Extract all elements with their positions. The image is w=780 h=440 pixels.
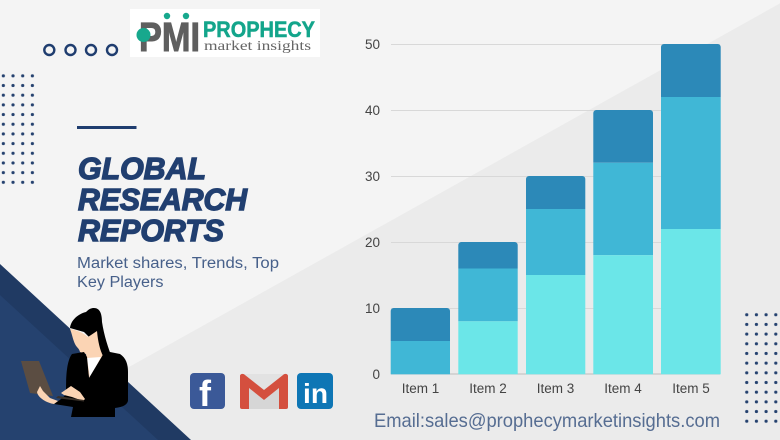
x axis labels: Item 1 (402, 381, 439, 396)
right dot grid (742, 310, 780, 426)
x axis labels: Item 4 (604, 381, 642, 396)
y axis labels: 50 (365, 37, 380, 52)
y axis labels: 20 (365, 235, 380, 250)
subtitle (77, 255, 279, 291)
icon: linkedin: in (303, 378, 328, 409)
item 1 bar (391, 308, 450, 374)
logo: Prophecy Market Insights (130, 9, 320, 60)
heading accent bar (77, 126, 136, 129)
item 5 bar (661, 44, 721, 374)
logo: Prophecy Market Insights: PROPHECY (203, 17, 315, 42)
item 2 bar (458, 242, 518, 374)
subtitle: Market shares, Trends, Top (77, 255, 279, 272)
email contact: Email:sales@prophecymarketinsights.com (374, 410, 720, 432)
x axis labels: Item 2 (469, 381, 507, 396)
x axis labels: Item 3 (537, 381, 574, 396)
x axis labels: Item 5 (672, 381, 710, 396)
y axis labels: 0 (372, 367, 380, 382)
y axis labels (365, 37, 380, 382)
logo: Prophecy Market Insights: market insights (204, 39, 311, 54)
y axis labels: 30 (365, 169, 380, 184)
icon: gmail (240, 374, 288, 409)
y axis labels: 10 (365, 301, 380, 316)
y axis labels: 40 (365, 103, 380, 118)
icon: linkedin (297, 373, 333, 409)
icon: woman with laptop (21, 308, 128, 417)
title (78, 151, 248, 248)
icon: facebook: f (199, 373, 212, 414)
subtitle: Key Players (77, 274, 164, 291)
title: REPORTS (78, 213, 224, 248)
title: RESEARCH (78, 182, 248, 217)
four ring decoration (44, 45, 117, 55)
icon: facebook (190, 373, 225, 414)
title: GLOBAL (78, 151, 206, 186)
item 4 bar (593, 110, 653, 374)
logo: Prophecy Market Insights: PMI (139, 14, 200, 60)
item 3 bar (526, 176, 585, 374)
dark corner triangle (0, 264, 191, 440)
left dot grid (0, 71, 37, 187)
stacked bar chart (365, 37, 721, 396)
x axis labels (402, 381, 710, 396)
